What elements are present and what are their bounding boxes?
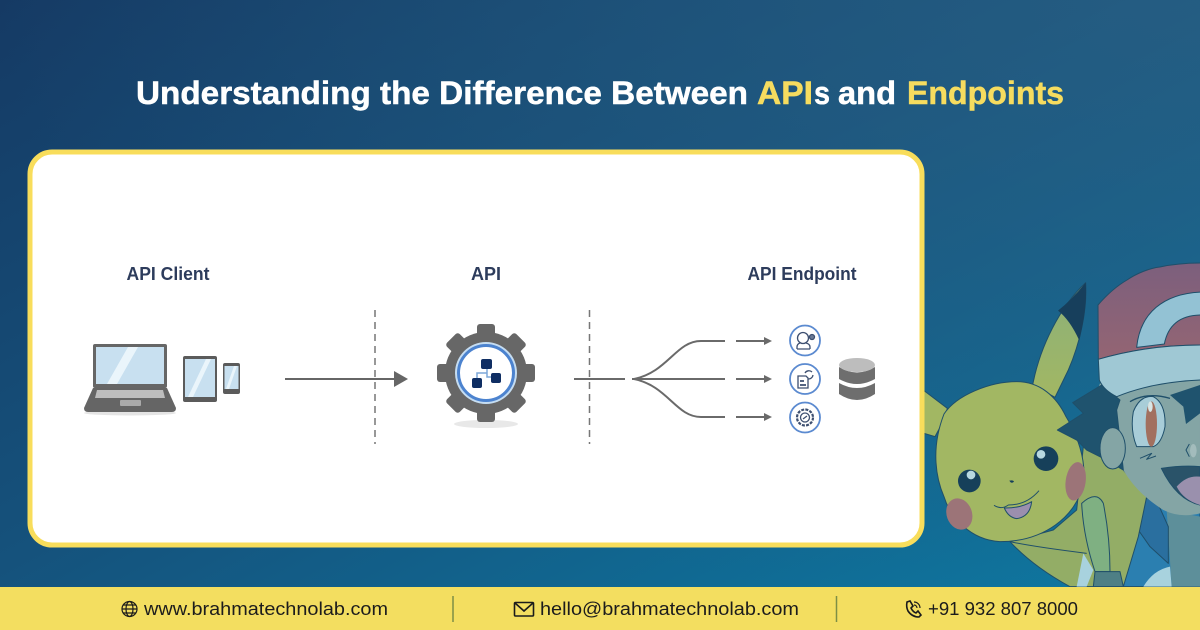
heading: API: API xyxy=(471,264,501,284)
icon: phone xyxy=(223,363,240,394)
icon: laptop xyxy=(84,344,176,416)
title: Endpoints xyxy=(907,75,1064,111)
divider: right dashed line xyxy=(588,310,590,444)
Pikachu head xyxy=(936,382,1088,542)
heading: API Client: API Client xyxy=(126,264,210,284)
title: Understanding the Difference Between xyxy=(136,75,748,111)
Pikachu mouth xyxy=(1009,480,1014,483)
icon: user endpoint xyxy=(790,326,820,356)
icon: API gear xyxy=(437,324,535,428)
icon: database xyxy=(839,358,875,400)
footer bar xyxy=(0,587,1200,630)
icon: document endpoint xyxy=(790,364,820,394)
footer: phone: +91 932 807 8000 xyxy=(928,598,1078,619)
Ash face xyxy=(1057,377,1200,515)
icon: phone handset xyxy=(907,601,921,617)
Pikachu eyes xyxy=(958,470,981,492)
arrow: branching lines to endpoints xyxy=(574,337,772,421)
title: API xyxy=(757,75,813,111)
Ash jacket and body xyxy=(1123,493,1200,587)
arrow: client to API xyxy=(285,371,408,387)
footer: email: hello@brahmatechnolab.com xyxy=(540,598,799,619)
heading: API Endpoint: API Endpoint xyxy=(748,264,857,284)
Ash eye xyxy=(1132,397,1165,447)
icon: tablet xyxy=(183,356,217,402)
Ash mouth xyxy=(1161,466,1200,505)
Ash cheek and nose marks xyxy=(1140,453,1156,459)
icon: settings endpoint xyxy=(790,402,820,432)
title: and xyxy=(838,75,896,111)
panel: diagram card xyxy=(30,152,922,545)
footer: website: www.brahmatechnolab.com xyxy=(143,598,388,619)
illustration: cartoon characters xyxy=(924,263,1200,587)
Pikachu ears xyxy=(924,283,1086,437)
title xyxy=(136,75,1064,111)
Pikachu cheeks xyxy=(946,498,972,530)
icon: envelope xyxy=(514,602,534,616)
Ash cap xyxy=(1098,263,1200,397)
title: s xyxy=(814,75,830,111)
Pikachu body xyxy=(1010,447,1147,587)
icon: globe xyxy=(122,602,137,616)
icon: client devices xyxy=(84,344,240,416)
divider: left dashed line xyxy=(374,310,376,444)
